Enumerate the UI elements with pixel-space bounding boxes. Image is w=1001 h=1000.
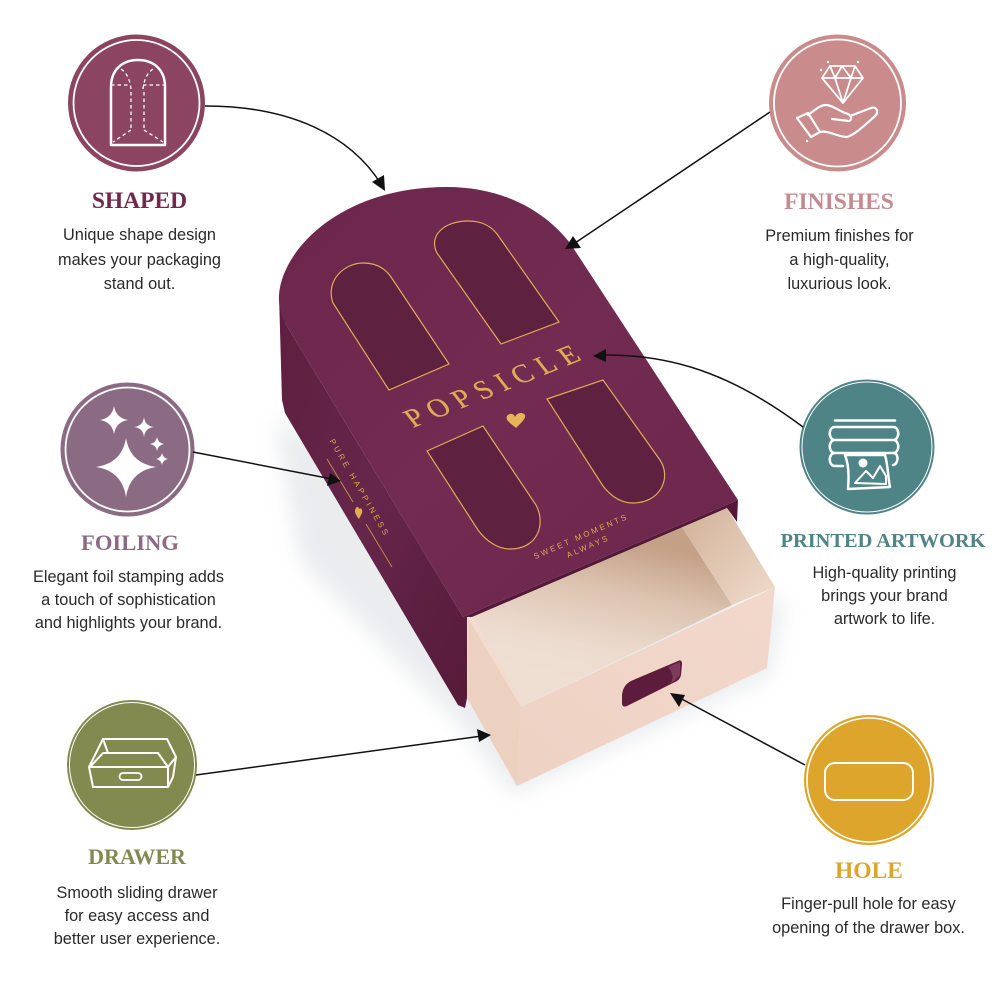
window upper right [435, 221, 559, 344]
icon: open drawer [67, 700, 197, 830]
text block: Unique shape design [63, 226, 216, 244]
panel: printed artwork [781, 380, 986, 628]
text block: better user experience. [54, 930, 220, 948]
text block: luxurious look. [787, 275, 892, 293]
tagline: SWEET MOMENTS [532, 512, 630, 561]
text block: a touch of sophistication [41, 591, 216, 609]
panel: drawer [54, 700, 220, 948]
text block: for easy access and [65, 907, 209, 925]
arrow: shaped [205, 106, 385, 191]
sleeve top face [279, 187, 738, 617]
icon: diamond in hand [769, 34, 906, 172]
text block: High-quality printing [813, 564, 956, 582]
arrow: drawer [196, 729, 491, 775]
icon: rounded hole [804, 715, 934, 845]
window lower left [427, 426, 540, 549]
drawer front panel [517, 587, 775, 786]
text block: Smooth sliding drawer [56, 884, 218, 902]
heading: HOLE [835, 858, 903, 884]
heading: SHAPED [92, 188, 187, 214]
panel: hole [772, 715, 965, 937]
text block: stand out. [104, 275, 175, 293]
sleeve lip [463, 500, 738, 617]
heading: DRAWER [88, 844, 187, 869]
text block: opening of the drawer box. [772, 919, 965, 937]
text block: artwork to life. [834, 610, 935, 628]
drawer left outer face [467, 618, 521, 786]
sleeve side face [279, 295, 467, 708]
heading: FOILING [81, 530, 179, 555]
arrow: printed artwork [593, 349, 803, 427]
arrow: finishes [565, 112, 770, 249]
text block: a high-quality, [789, 251, 890, 269]
side label: PURE HAPPINESS [328, 437, 392, 539]
arrow: foiling [193, 452, 341, 486]
heart [507, 413, 525, 428]
icon: printer rollers [800, 380, 934, 514]
drawer interior [468, 508, 775, 707]
text block: makes your packaging [58, 251, 221, 269]
panel: shaped [58, 34, 221, 293]
text block: Premium finishes for [765, 227, 914, 245]
text block: Finger-pull hole for easy [781, 895, 957, 913]
text block: Elegant foil stamping adds [33, 568, 224, 586]
arrow: hole [670, 693, 805, 765]
heading: FINISHES [784, 189, 894, 215]
panel: finishes [765, 34, 914, 293]
window lower right [547, 380, 665, 503]
brand name: POPSICLE [398, 340, 587, 434]
product: popsicle drawer box [275, 187, 785, 794]
icon: shaped box [68, 34, 205, 172]
panel: foiling [33, 382, 224, 632]
icon: sparkles [60, 382, 194, 516]
text block: and highlights your brand. [35, 614, 222, 632]
finger-pull hole [622, 660, 682, 707]
window upper left [331, 263, 449, 390]
text block: brings your brand [821, 587, 948, 605]
heading: PRINTED ARTWORK [781, 530, 986, 552]
tagline: ALWAYS [565, 533, 611, 560]
